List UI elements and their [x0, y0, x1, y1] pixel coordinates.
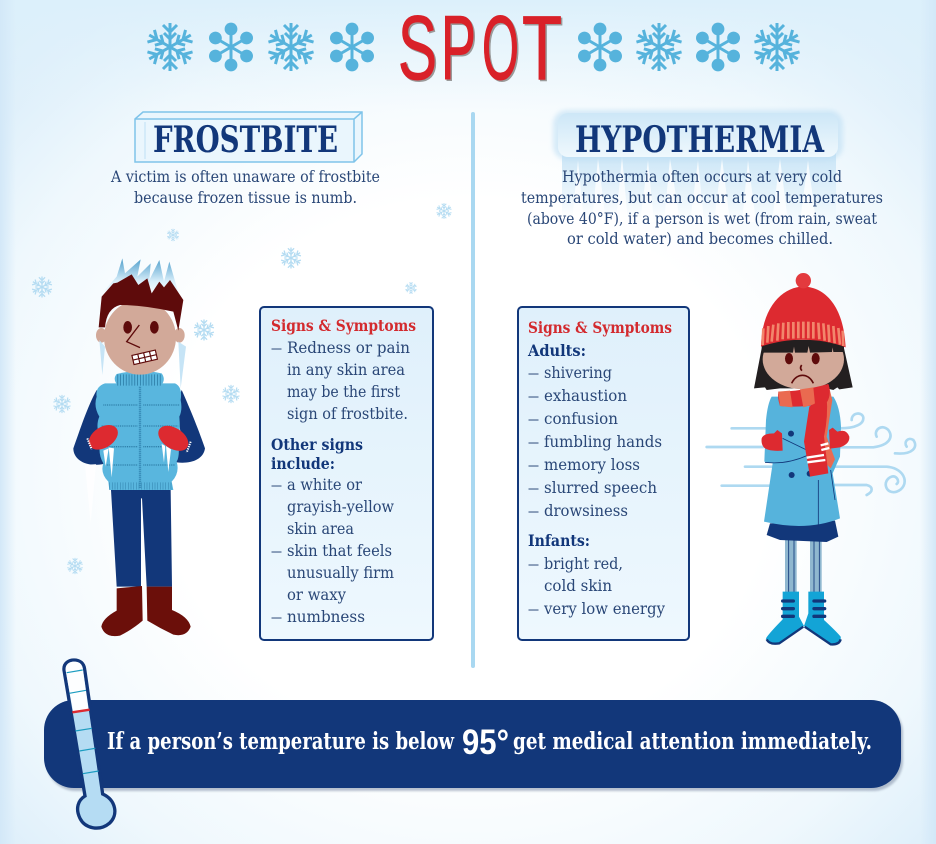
panel: hypothermia — [518, 110, 915, 645]
panel: frostbite signs and symptoms: a white or — [287, 476, 363, 494]
pants — [111, 490, 172, 587]
center divider — [471, 112, 475, 668]
skirt — [767, 521, 838, 542]
panel: hypothermia signs and symptoms: memory loss — [544, 456, 640, 474]
title: SPOT: P — [442, 0, 478, 100]
title: SPOT: T — [524, 0, 564, 100]
panel: frostbite signs and symptoms: Other signs — [271, 435, 363, 454]
collar — [115, 371, 164, 387]
panel: frostbite signs and symptoms: Redness or pain — [287, 339, 410, 357]
fringe — [762, 340, 844, 353]
text: hypothermia intro: Hypothermia often occurs at very cold — [562, 168, 842, 186]
panel: frostbite signs and symptoms: or waxy — [287, 586, 346, 604]
panel: hypothermia signs and symptoms: fumbling hands — [544, 433, 662, 451]
icon: thermometer — [64, 660, 115, 828]
ear icicles — [99, 340, 186, 388]
face — [104, 300, 176, 375]
panel: frostbite signs and symptoms: unusually firm — [287, 564, 394, 582]
panel: hypothermia signs and symptoms: very low energy — [543, 600, 665, 618]
panel: hypothermia signs and symptoms: — — [528, 412, 539, 428]
panel: hypothermia signs and symptoms: Infants: — [528, 531, 590, 550]
panel: frostbite signs and symptoms: grayish-yellow — [287, 498, 395, 516]
ice on hair — [103, 258, 180, 297]
panel: frostbite signs and symptoms: skin area — [287, 520, 354, 538]
text: hypothermia intro: (above 40°F), if a person is wet (from rain, sweat — [527, 210, 878, 228]
boots — [766, 592, 804, 644]
mittens — [762, 430, 783, 451]
pompom — [796, 273, 811, 288]
panel: hypothermia signs and symptoms: bright red, — [544, 555, 623, 573]
panel: frostbite signs and symptoms: numbness — [287, 608, 365, 626]
mittens — [84, 420, 122, 455]
text: hypothermia intro — [521, 168, 883, 248]
panel: frostbite signs and symptoms — [260, 307, 433, 640]
illustration: shivering girl in wind — [707, 273, 915, 645]
icons: left snowflakes — [146, 23, 376, 71]
panel: hypothermia signs and symptoms: slurred speech — [544, 479, 657, 497]
ears — [96, 328, 107, 343]
banner: temperature warning: If a person’s temperature is below — [107, 728, 455, 755]
panel: hypothermia signs and symptoms: cold skin — [544, 577, 612, 595]
panel: hypothermia signs and symptoms: — — [528, 389, 539, 405]
panel: hypothermia signs and symptoms: Adults: — [527, 341, 586, 360]
panel: frostbite signs and symptoms: skin that feels — [287, 542, 392, 560]
panel: frostbite signs and symptoms: — — [271, 610, 282, 626]
heading: HYPOTHERMIA with icicles: HYPOTHERMIA — [575, 119, 825, 161]
panel: frostbite — [73, 112, 433, 640]
panel: frostbite signs and symptoms: sign of frostbite. — [287, 405, 408, 423]
panel: hypothermia signs and symptoms: — — [528, 504, 539, 520]
coat — [764, 397, 841, 526]
hat — [761, 287, 846, 347]
title: SPOT: T — [522, 0, 562, 99]
panel: hypothermia signs and symptoms — [518, 307, 689, 640]
panel: hypothermia signs and symptoms: — — [528, 435, 539, 451]
hand icicles — [103, 444, 171, 477]
title: SPOT: O — [484, 0, 520, 100]
coat lines and buttons — [765, 438, 835, 527]
panel: hypothermia signs and symptoms: — — [528, 458, 539, 474]
text: frostbite intro: A victim is often unaware of frostbite — [110, 168, 380, 186]
scarf — [818, 384, 835, 468]
heading: FROSTBITE ice block: FROSTBITE — [153, 119, 338, 161]
title row: snowflakes and SPOT — [146, 0, 801, 100]
panel: frostbite signs and symptoms: — — [271, 544, 282, 560]
panel: frostbite signs and symptoms: — — [271, 478, 282, 494]
wind lines — [707, 414, 915, 495]
panel: frostbite signs and symptoms: in any skin area — [287, 361, 405, 379]
title: SPOT: O — [482, 0, 519, 99]
panel: hypothermia signs and symptoms: — — [528, 557, 539, 573]
icons: right snowflakes — [576, 23, 801, 71]
panel: hypothermia signs and symptoms: exhaustion — [544, 387, 627, 405]
scattered snowflakes — [31, 203, 452, 574]
hair — [99, 274, 183, 331]
text: hypothermia intro: or cold water) and becomes chilled. — [567, 230, 833, 248]
eyes and nose — [123, 321, 132, 334]
panel: hypothermia signs and symptoms: — — [528, 602, 539, 618]
panel: frostbite signs and symptoms: — — [271, 341, 282, 357]
panel: frostbite signs and symptoms: may be the first — [287, 383, 401, 401]
sleeves — [73, 390, 205, 465]
title: SPOT: S — [400, 0, 438, 100]
eyes, nose, mouth — [785, 353, 793, 364]
title: SPOT — [398, 0, 564, 100]
panel: hypothermia signs and symptoms: — — [528, 481, 539, 497]
legs — [785, 540, 822, 593]
panel: frostbite signs and symptoms: include: — [271, 454, 335, 473]
banner: temperature warning — [44, 700, 903, 791]
heading: FROSTBITE ice block — [135, 112, 362, 162]
banner: temperature warning: 95° — [462, 723, 509, 762]
boots — [101, 586, 191, 636]
text: hypothermia intro: temperatures, but can occur at cool temperatures — [521, 189, 883, 207]
title: SPOT: S — [398, 0, 437, 99]
teeth — [132, 350, 157, 365]
panel: hypothermia signs and symptoms: shivering — [544, 364, 612, 382]
vest — [95, 383, 181, 490]
hair — [754, 348, 853, 390]
panel: hypothermia signs and symptoms: confusion — [544, 410, 618, 428]
text: frostbite intro: because frozen tissue is numb. — [134, 189, 357, 207]
panel: hypothermia signs and symptoms: — — [528, 366, 539, 382]
text: frostbite intro — [110, 168, 380, 207]
heading: HYPOTHERMIA with icicles — [553, 110, 843, 222]
panel: frostbite signs and symptoms: Signs & Symptoms — [271, 316, 416, 335]
title: SPOT: P — [441, 0, 476, 99]
face — [763, 329, 844, 389]
panel: hypothermia signs and symptoms: drowsiness — [544, 502, 628, 520]
illustration: frozen boy — [73, 258, 205, 636]
panel: hypothermia signs and symptoms: Signs & Symptoms — [528, 318, 672, 337]
